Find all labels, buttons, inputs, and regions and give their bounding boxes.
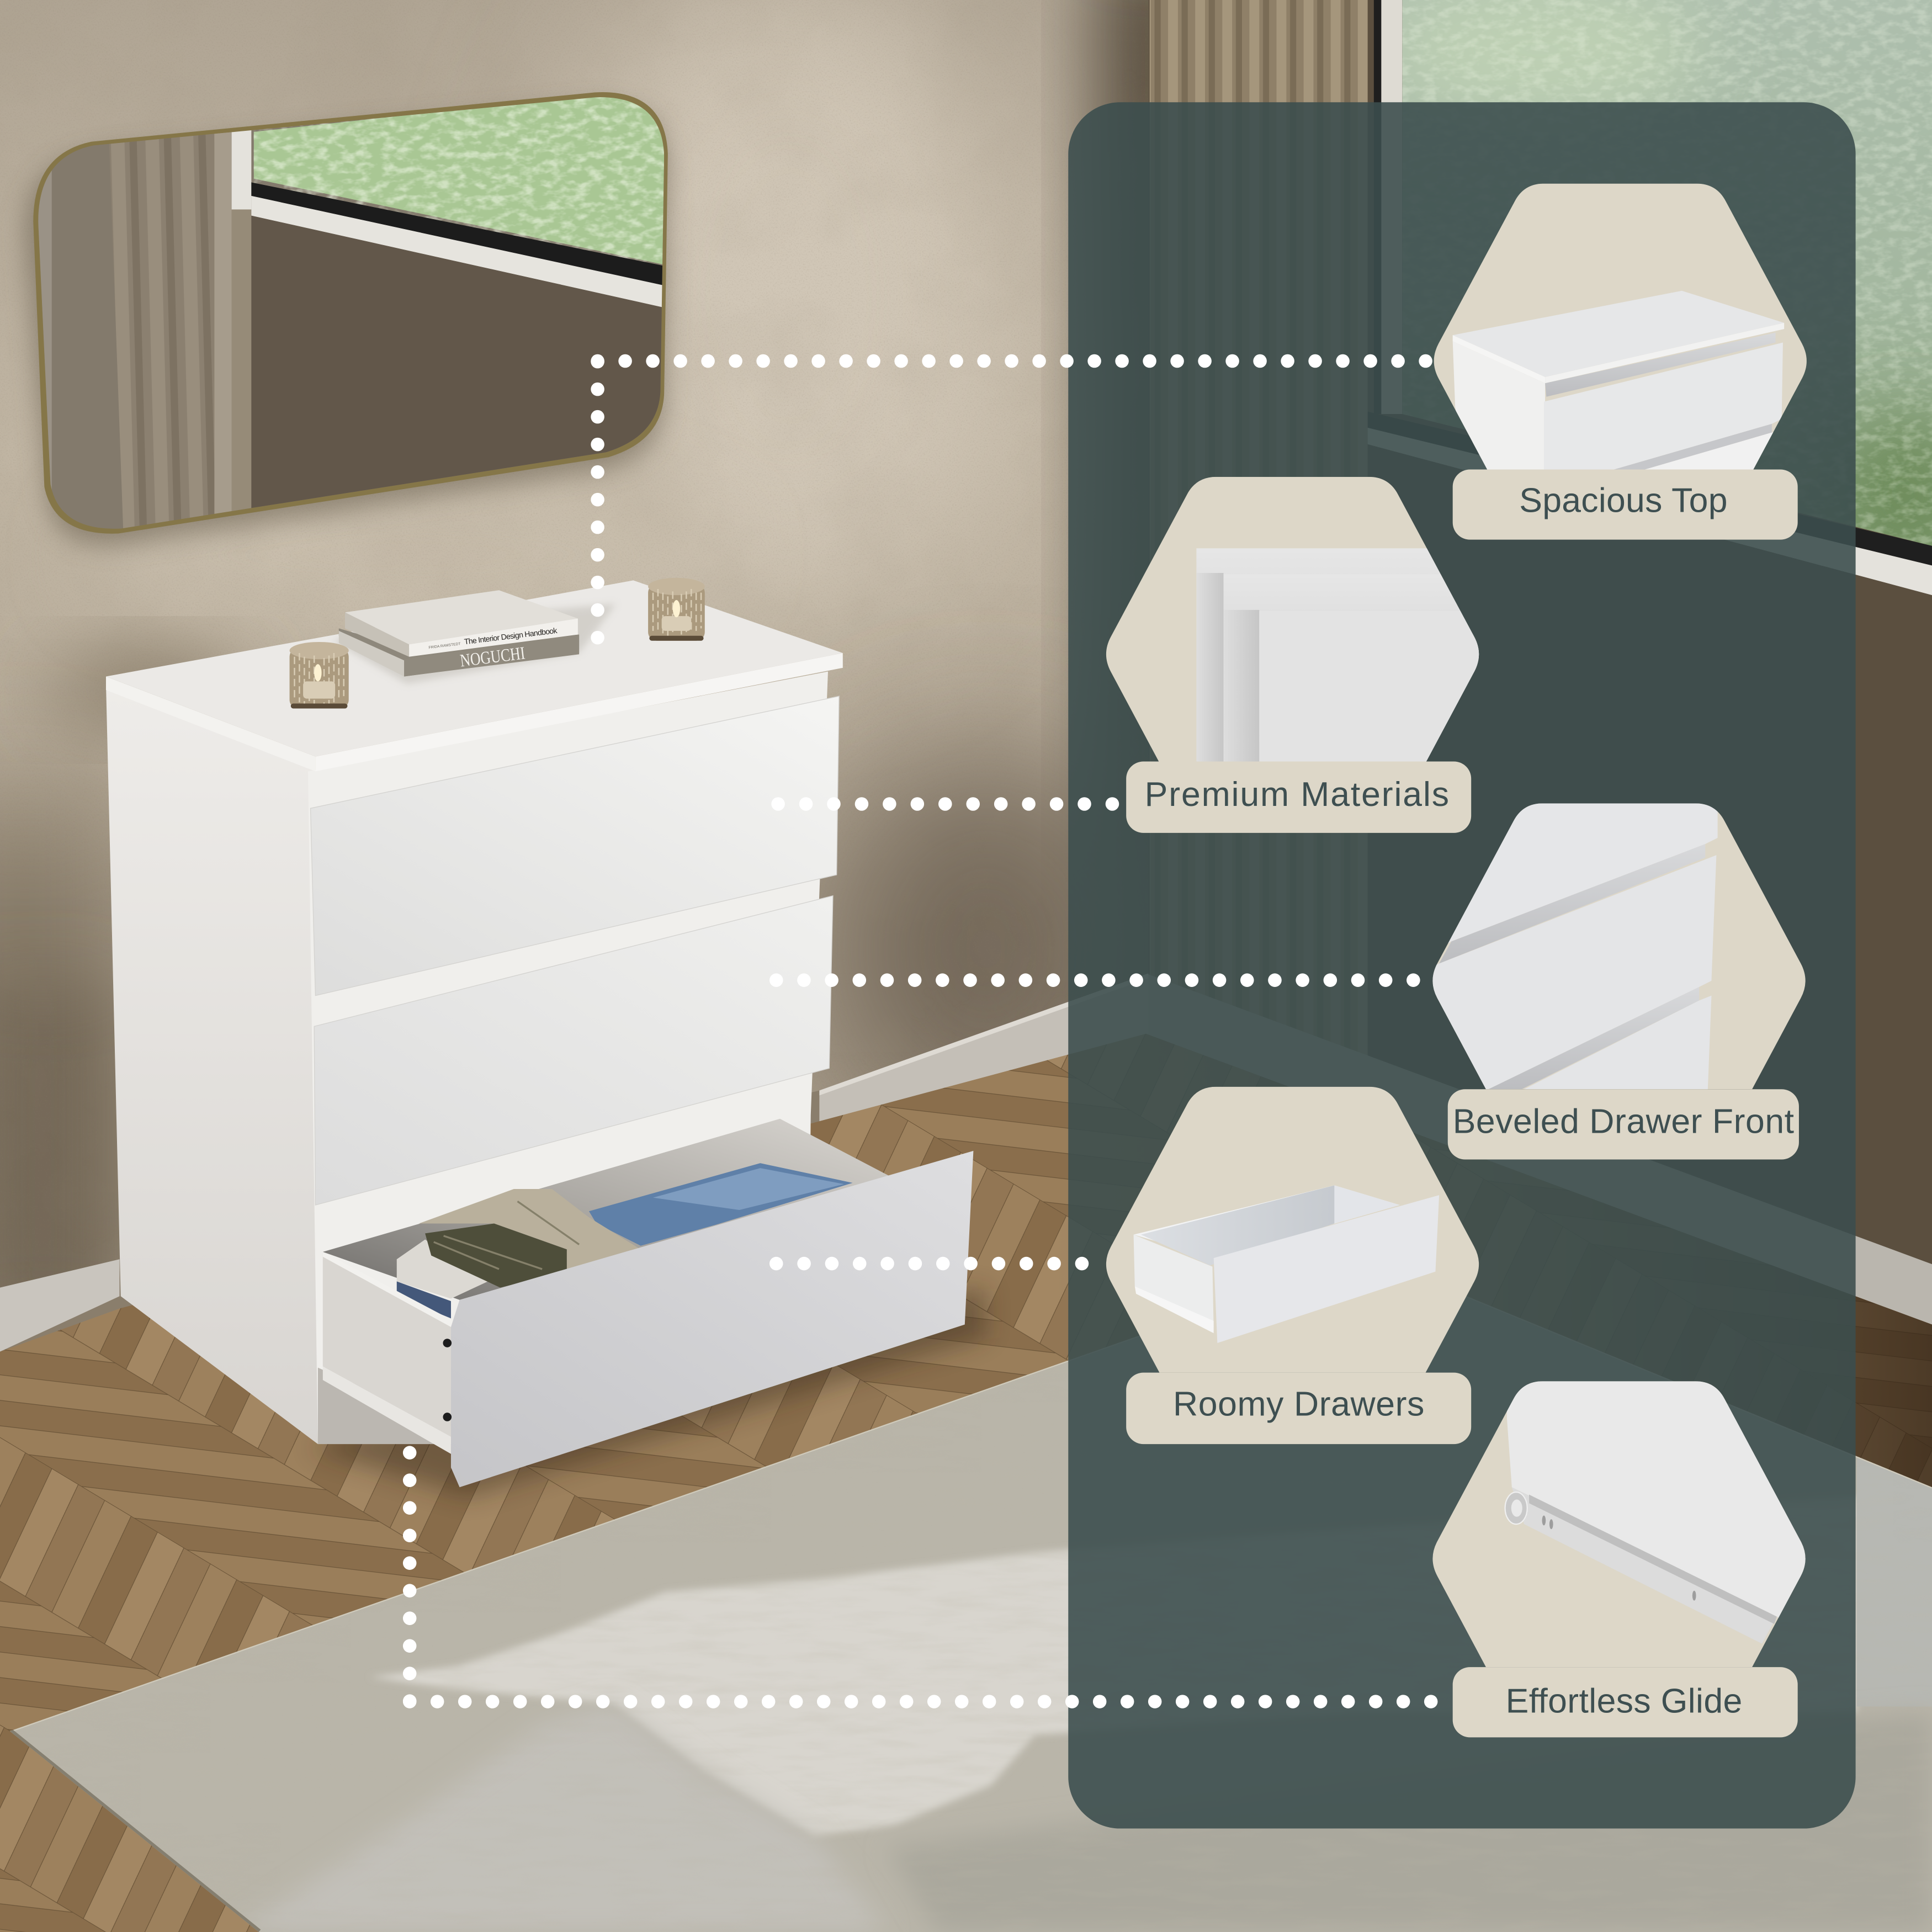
hexagon with layered panels detail bbox=[1097, 468, 1495, 771]
cam holes bbox=[443, 1339, 452, 1421]
folded clothes bbox=[397, 1163, 853, 1318]
upper book bbox=[345, 590, 578, 657]
label bbox=[1453, 1667, 1798, 1737]
glass candle right bbox=[648, 578, 705, 641]
label: Beveled Drawer Front bbox=[1453, 1102, 1794, 1140]
middle drawer bbox=[314, 896, 833, 1205]
open bottom drawer bbox=[323, 1119, 973, 1487]
wall mirror bbox=[25, 74, 678, 546]
dotted leader: spacious top bbox=[598, 361, 1429, 638]
upper book: FRIDA RAMSTEDT bbox=[428, 642, 461, 650]
drawer front panel bbox=[451, 1151, 973, 1487]
dotted leader: beveled drawer front bbox=[776, 977, 1417, 983]
right wall, window and curtain bbox=[1146, 0, 1932, 1355]
label bbox=[1126, 1373, 1471, 1444]
lower book: NOGUCHI bbox=[459, 643, 526, 671]
top drawer bbox=[310, 696, 839, 996]
stacked books bbox=[333, 590, 616, 684]
feature: spacious top bbox=[1417, 172, 1824, 540]
lower book bbox=[339, 628, 579, 676]
label bbox=[1448, 1089, 1799, 1159]
left wall with plaster texture bbox=[0, 0, 1207, 1355]
label bbox=[1126, 761, 1471, 833]
herringbone wood floor bbox=[0, 1023, 1932, 1932]
dotted leader: premium materials bbox=[778, 801, 1115, 807]
feature: beveled drawer front bbox=[1417, 789, 1824, 1159]
hexagon with drawer slide detail bbox=[1417, 1355, 1824, 1676]
feature: premium materials bbox=[1097, 468, 1495, 833]
label: Roomy Drawers bbox=[1173, 1385, 1424, 1424]
chest side panel bbox=[106, 684, 318, 1444]
label: Spacious Top bbox=[1519, 481, 1727, 519]
hexagon with empty drawer detail bbox=[1097, 1078, 1491, 1380]
label: Effortless Glide bbox=[1506, 1682, 1742, 1721]
hexagon with chest top detail bbox=[1417, 172, 1824, 481]
drawer side bbox=[323, 1252, 451, 1437]
translucent feature panel bbox=[1068, 102, 1856, 1829]
left wall baseboards bbox=[0, 973, 1148, 1352]
chest top surface bbox=[106, 580, 843, 771]
feature: roomy drawers bbox=[1097, 1078, 1491, 1444]
chest of drawers bbox=[106, 578, 973, 1487]
drawer slide rail bbox=[323, 1366, 451, 1454]
label: Premium Materials bbox=[1145, 775, 1449, 814]
drawer interior bbox=[323, 1119, 891, 1300]
chest front carcass bbox=[308, 672, 828, 1444]
upper book: The Interior Design Handbook bbox=[464, 626, 558, 646]
area rug bbox=[0, 1244, 1932, 1932]
dotted leader: effortless glide bbox=[410, 1453, 1435, 1702]
glass candle left bbox=[290, 642, 349, 708]
feature: effortless glide bbox=[1417, 1355, 1824, 1737]
hexagon with drawer bevel detail bbox=[1417, 789, 1824, 1097]
label bbox=[1453, 469, 1798, 540]
dotted leader: roomy drawers bbox=[776, 1261, 1084, 1267]
